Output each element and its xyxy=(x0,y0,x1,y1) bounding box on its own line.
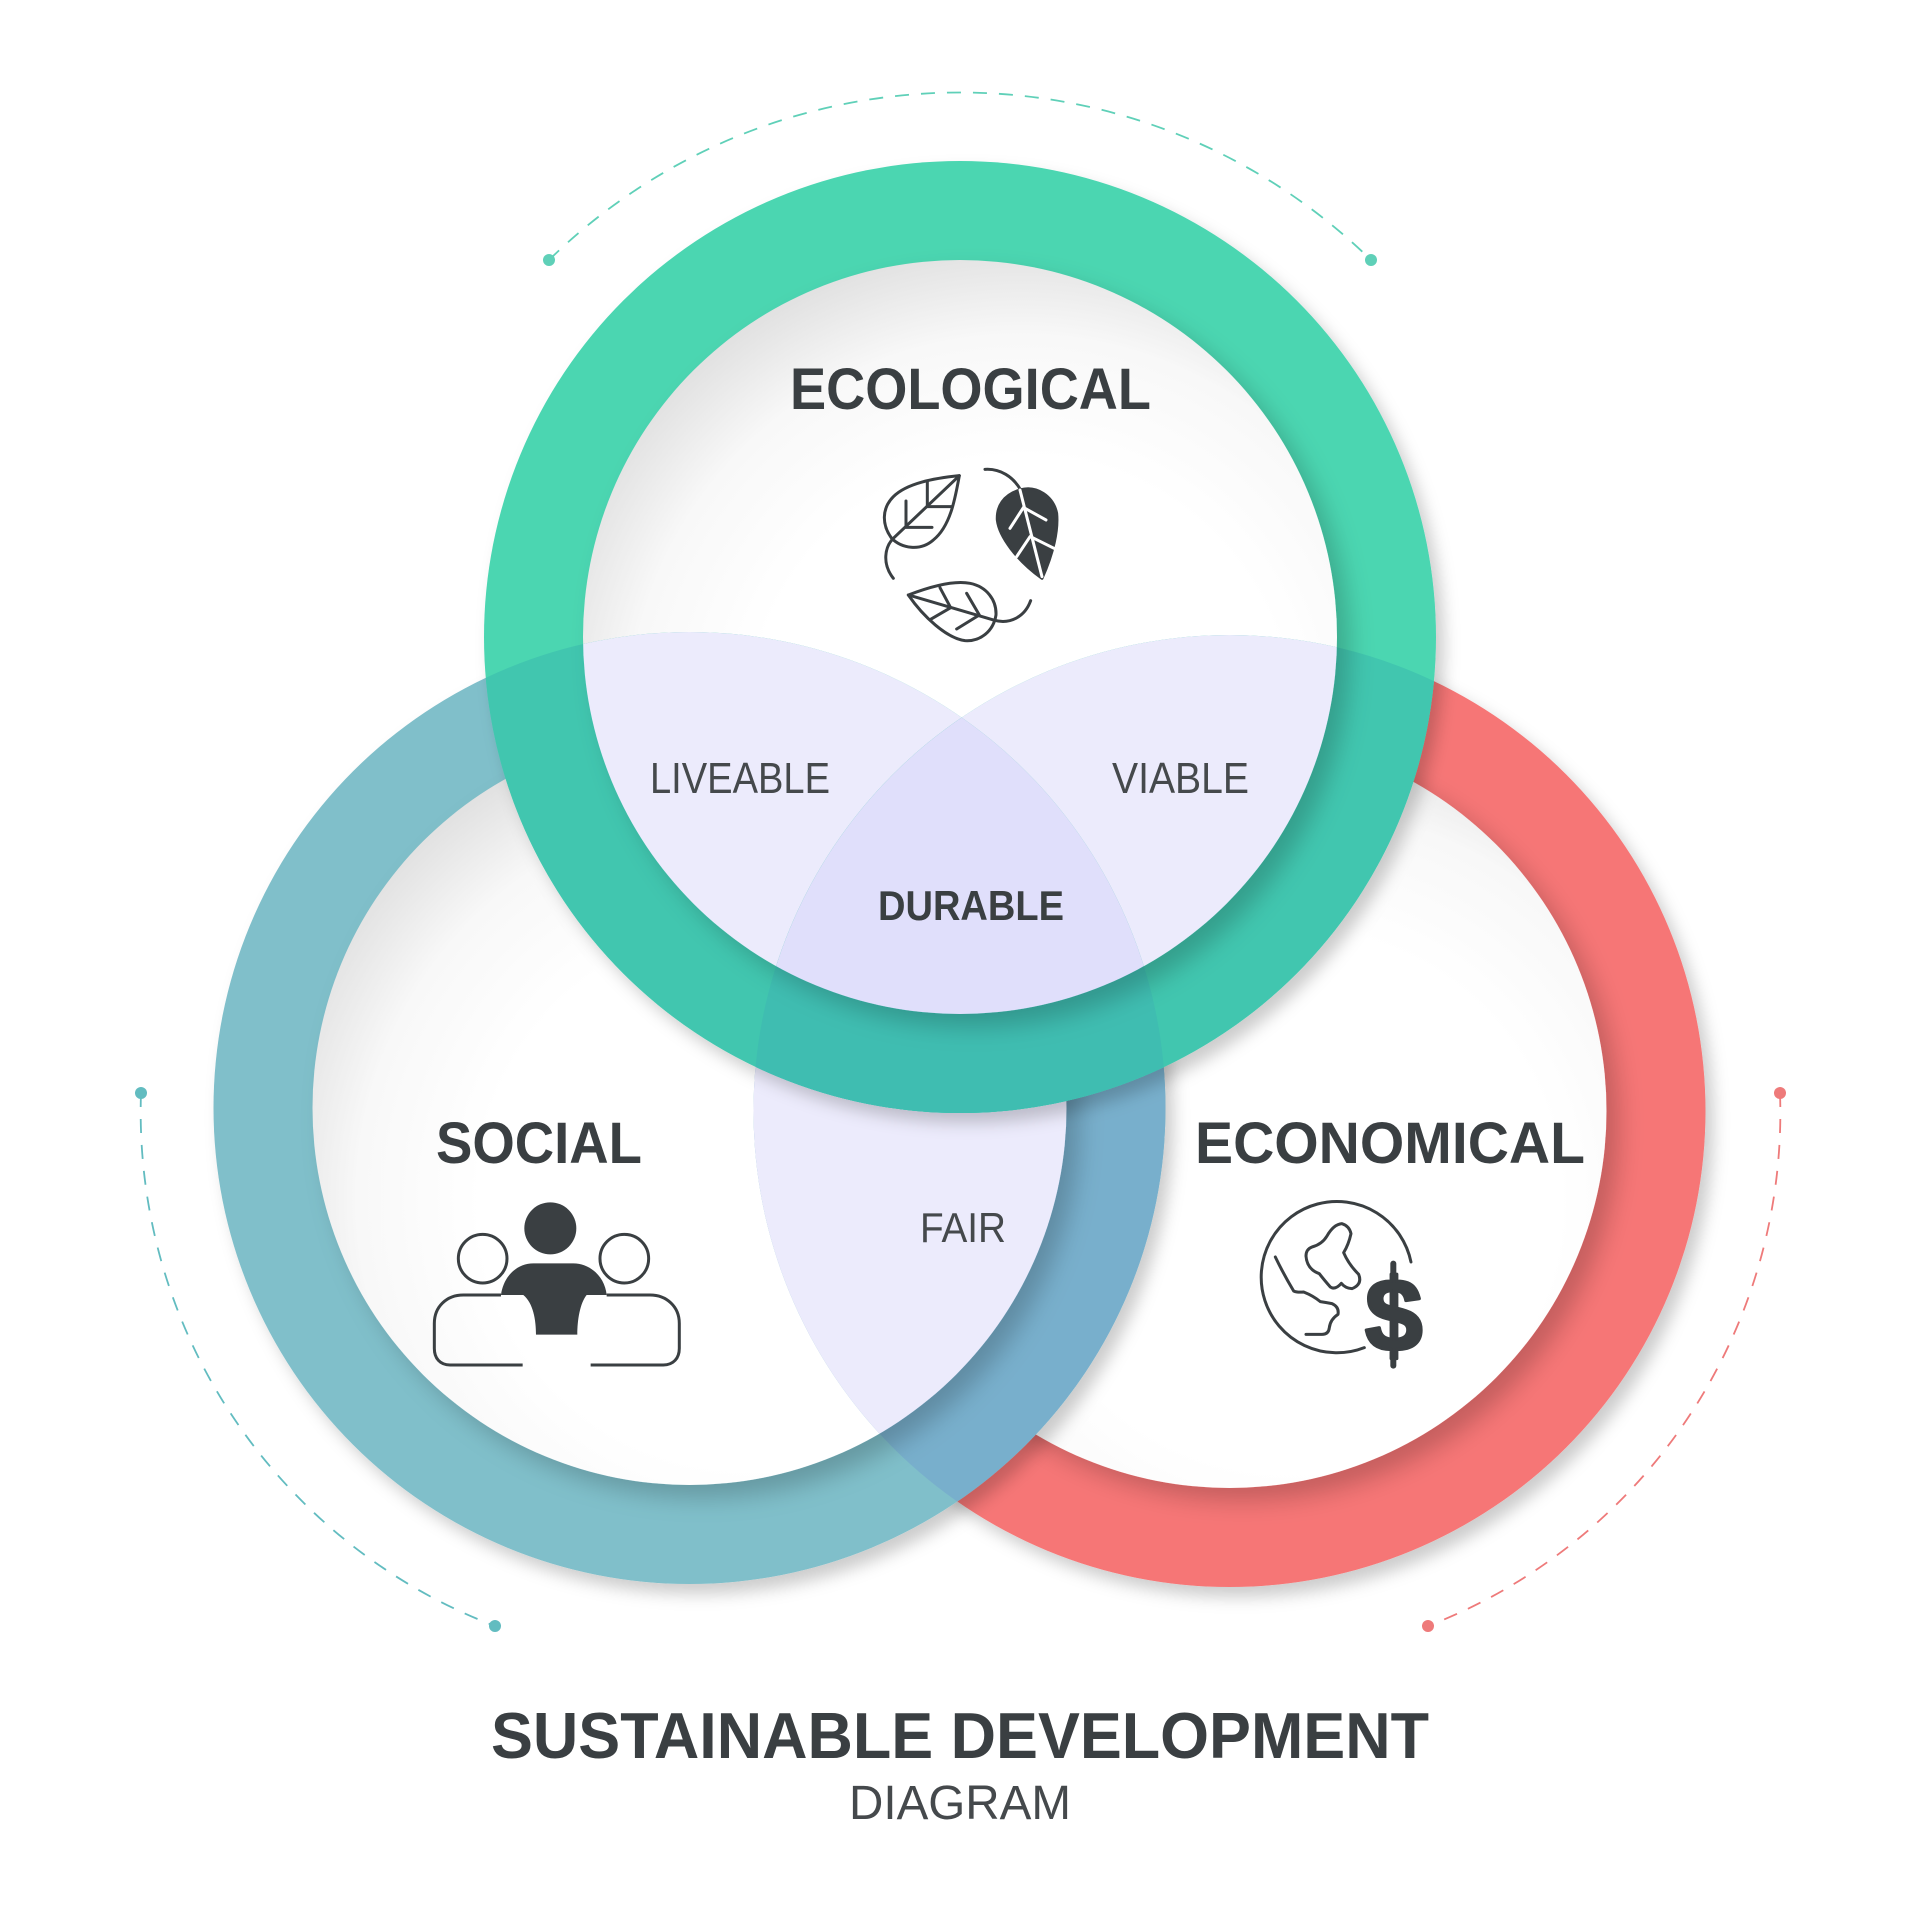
heading: social: SOCIAL xyxy=(436,1111,642,1176)
subtitle: DIAGRAM xyxy=(849,1777,1071,1830)
circle: ecological xyxy=(484,161,1436,1113)
icon: globe with dollar xyxy=(1261,1201,1422,1373)
label: durable: DURABLE xyxy=(878,882,1064,929)
label: liveable: LIVEABLE xyxy=(650,754,830,803)
outline leaf bottom xyxy=(908,582,1031,641)
circle: economical xyxy=(754,635,1706,1587)
heading: economical: ECONOMICAL xyxy=(1195,1111,1585,1176)
overlap: ecological and economical xyxy=(756,635,1434,1113)
dashed arc: social xyxy=(135,1087,501,1632)
overlap: social and economical xyxy=(754,1067,1166,1502)
label: fair: FAIR xyxy=(920,1204,1006,1251)
icon: three leaves xyxy=(884,469,1057,641)
overlap: center of all three xyxy=(756,718,1164,1113)
overlap: ecological and social xyxy=(486,632,1066,1113)
icon: three people xyxy=(434,1202,679,1365)
heading: ecological: ECOLOGICAL xyxy=(790,357,1151,422)
outline leaf left xyxy=(884,476,959,578)
icon: globe with dollar: $ xyxy=(1365,1257,1422,1373)
filled leaf right xyxy=(985,469,1057,578)
label: viable: VIABLE xyxy=(1112,754,1249,803)
dashed arc: economical xyxy=(1422,1087,1786,1632)
dashed arc: ecological xyxy=(543,93,1377,266)
sustainable development venn diagram xyxy=(135,92,1786,1820)
circle: social xyxy=(214,632,1166,1584)
title: SUSTAINABLE DEVELOPMENT xyxy=(491,1699,1429,1772)
